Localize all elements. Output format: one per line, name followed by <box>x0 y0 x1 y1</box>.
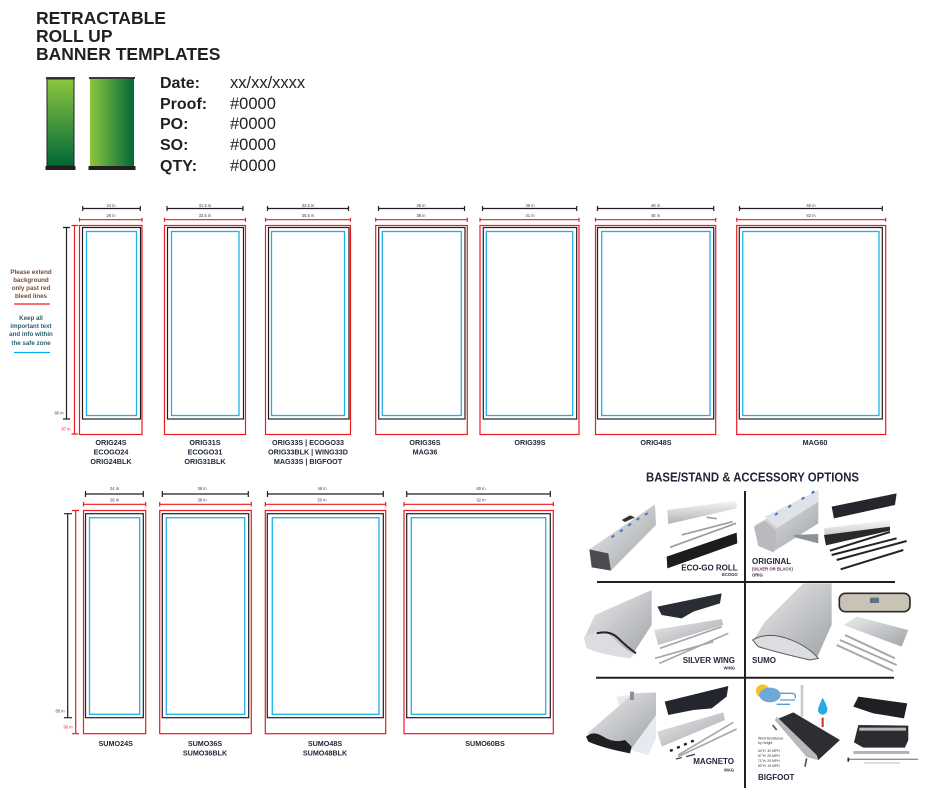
panel: original <box>752 490 907 578</box>
banner template: SUMO60BS: 60 in <box>476 486 486 491</box>
proof details: #0000 <box>230 157 276 175</box>
proof details: Date: <box>160 75 200 92</box>
banner template: ORIG39S: 39 in <box>525 203 535 208</box>
legend: bleed and safe zone notes: important text <box>10 323 52 330</box>
legend: bleed and safe zone notes: background <box>13 277 49 284</box>
banner template: MAG60 <box>737 203 886 447</box>
height dimension row 2: 90 in <box>63 724 73 730</box>
panel: magneto <box>586 686 737 772</box>
banner template: ORIG24S: 24 in <box>106 203 116 208</box>
banner template: SUMO60BS <box>404 486 553 748</box>
panel: silver wing: SILVER WING <box>683 656 735 665</box>
banner template: ORIG36S: 38 in <box>416 213 426 218</box>
banner template: ORIG31S: ORIG31S <box>189 438 221 447</box>
panel: original: ORIG <box>752 572 763 578</box>
panel: magneto: MAG <box>724 768 734 772</box>
banner template: SUMO36S: 38 in <box>197 498 207 502</box>
banner template: ORIG31S: ORIG31BLK <box>184 457 226 466</box>
banner template: SUMO48S: SUMO48S <box>308 739 342 748</box>
banner template: ORIG36S: 36 in <box>416 203 426 208</box>
panel: eco-go roll <box>589 501 738 577</box>
banner template: MAG60: MAG60 <box>803 438 827 447</box>
panel: original: (SILVER OR BLACK) <box>752 566 793 572</box>
panel: bigfoot: 67"H: 25 MPH <box>758 754 780 758</box>
height dimension row 1: 80 in <box>54 410 64 416</box>
legend: bleed and safe zone notes: bleed lines <box>15 293 48 300</box>
banner template: SUMO36S: SUMO36S <box>188 739 222 748</box>
banner template: ORIG48S: 48 in <box>651 203 661 208</box>
proof details: xx/xx/xxxx <box>230 74 306 92</box>
banner template: SUMO48S: 50 in <box>317 498 327 502</box>
banner template: ORIG39S: ORIG39S <box>514 438 546 447</box>
banner template: ORIG33S: 33.5 in <box>302 203 315 208</box>
banner template: ORIG31S: 31.5 in <box>199 203 212 208</box>
banner template: SUMO36S <box>160 486 251 758</box>
banner template: ORIG33S: 35.5 in <box>302 213 315 218</box>
banner template: MAG60: 60 in <box>806 203 816 208</box>
proof details: #0000 <box>230 136 276 154</box>
legend: bleed and safe zone notes: the safe zone <box>11 340 51 347</box>
proof details: #0000 <box>230 95 276 113</box>
title: ROLL UP <box>36 26 113 46</box>
height dimension row 2: 85 in <box>55 708 65 714</box>
height dimension row 2 <box>55 510 79 734</box>
banner template: ORIG39S <box>480 203 579 447</box>
panel: bigfoot: BIGFOOT <box>758 773 795 782</box>
proof details: Proof: <box>160 96 207 113</box>
title <box>36 8 220 64</box>
panel: sumo: SUMO <box>752 656 776 665</box>
banner template: SUMO24S: 26 in <box>110 498 120 502</box>
heading: base/stand options: BASE/STAND & ACCESSORY OPTIONS <box>646 470 859 484</box>
proof details: #0000 <box>230 115 276 133</box>
banner template: SUMO60BS: 62 in <box>476 498 486 502</box>
panel: eco-go roll: ECO-GO ROLL <box>681 564 738 572</box>
banner template: SUMO36S: 36 in <box>197 486 207 491</box>
banner template: ORIG33S: ORIG33BLK | WING33D <box>268 448 348 456</box>
legend: bleed and safe zone notes: Please extend <box>10 269 52 276</box>
banner template: ORIG24S <box>80 203 142 466</box>
banner template: ORIG31S <box>164 203 246 466</box>
proof details <box>160 74 306 175</box>
banner template: SUMO24S <box>84 486 146 748</box>
icon: wide green banner <box>88 77 136 170</box>
legend: bleed and safe zone notes: Keep all <box>19 315 43 322</box>
banner template: SUMO48S: SUMO48BLK <box>303 748 348 758</box>
banner template: ORIG33S <box>266 203 350 466</box>
legend: bleed and safe zone notes: only past red <box>12 285 50 292</box>
banner template: SUMO48S <box>265 486 386 758</box>
height dimension row 1 <box>54 226 78 434</box>
banner template: ORIG36S <box>376 203 467 456</box>
banner template: ORIG48S <box>596 203 716 447</box>
banner template: SUMO60BS: SUMO60BS <box>465 739 505 748</box>
legend: bleed and safe zone notes <box>9 269 53 352</box>
title: RETRACTABLE <box>36 8 166 28</box>
banner template: ORIG33S: ORIG33S | ECOGO33 <box>272 438 344 447</box>
banner template: ORIG31S: 33.5 in <box>199 213 212 218</box>
banner template: ORIG33S: MAG33S | BIGFOOT <box>274 457 343 466</box>
banner template: ORIG48S: ORIG48S <box>640 438 672 447</box>
banner template: SUMO24S: SUMO24S <box>99 739 133 748</box>
proof details: SO: <box>160 137 188 154</box>
banner template: ORIG36S: ORIG36S <box>409 438 441 447</box>
banner template: ORIG24S: 26 in <box>106 213 116 218</box>
panel: silver wing: WING <box>724 666 735 670</box>
banner template: SUMO24S: 24 in <box>110 486 120 491</box>
height dimension row 1: 87 in <box>61 426 71 432</box>
panel: bigfoot: 80"H: 15 MPH <box>758 764 780 768</box>
banner template: ORIG36S: MAG36 <box>413 448 437 456</box>
banner template: ORIG24S: ORIG24S <box>95 438 127 447</box>
legend: bleed and safe zone notes: and info within <box>9 331 53 338</box>
banner template: ORIG24S: ORIG24BLK <box>90 457 132 466</box>
icon: narrow green banner <box>46 77 76 170</box>
banner template: SUMO48S: 48 in <box>317 486 327 491</box>
banner template: ORIG39S: 41 in <box>525 213 535 218</box>
panel: silver wing <box>584 590 735 670</box>
panel: eco-go roll: ECOGO <box>722 572 738 577</box>
panel: bigfoot: 71"H: 20 MPH <box>758 759 780 763</box>
banner template: ORIG31S: ECOGO31 <box>188 448 222 456</box>
banner template: ORIG24S: ECOGO24 <box>94 448 128 456</box>
banner template: ORIG48S: 48 in <box>651 213 661 218</box>
panel: magneto: MAGNETO <box>693 757 734 766</box>
panel: bigfoot: by Height <box>758 741 772 745</box>
panel: original: ORIGINAL <box>752 557 791 566</box>
banner template: MAG60: 62 in <box>806 213 816 218</box>
proof details: QTY: <box>160 158 197 175</box>
panel: sumo <box>752 583 910 671</box>
panel: bigfoot: 60"H: 30 MPH <box>758 749 780 753</box>
panel: bigfoot <box>756 684 918 782</box>
title: BANNER TEMPLATES <box>36 44 220 64</box>
proof details: PO: <box>160 116 188 133</box>
panel: bigfoot: Wind Resistance <box>758 736 784 740</box>
options grid lines <box>596 491 895 788</box>
banner template: SUMO36S: SUMO36BLK <box>183 748 228 758</box>
